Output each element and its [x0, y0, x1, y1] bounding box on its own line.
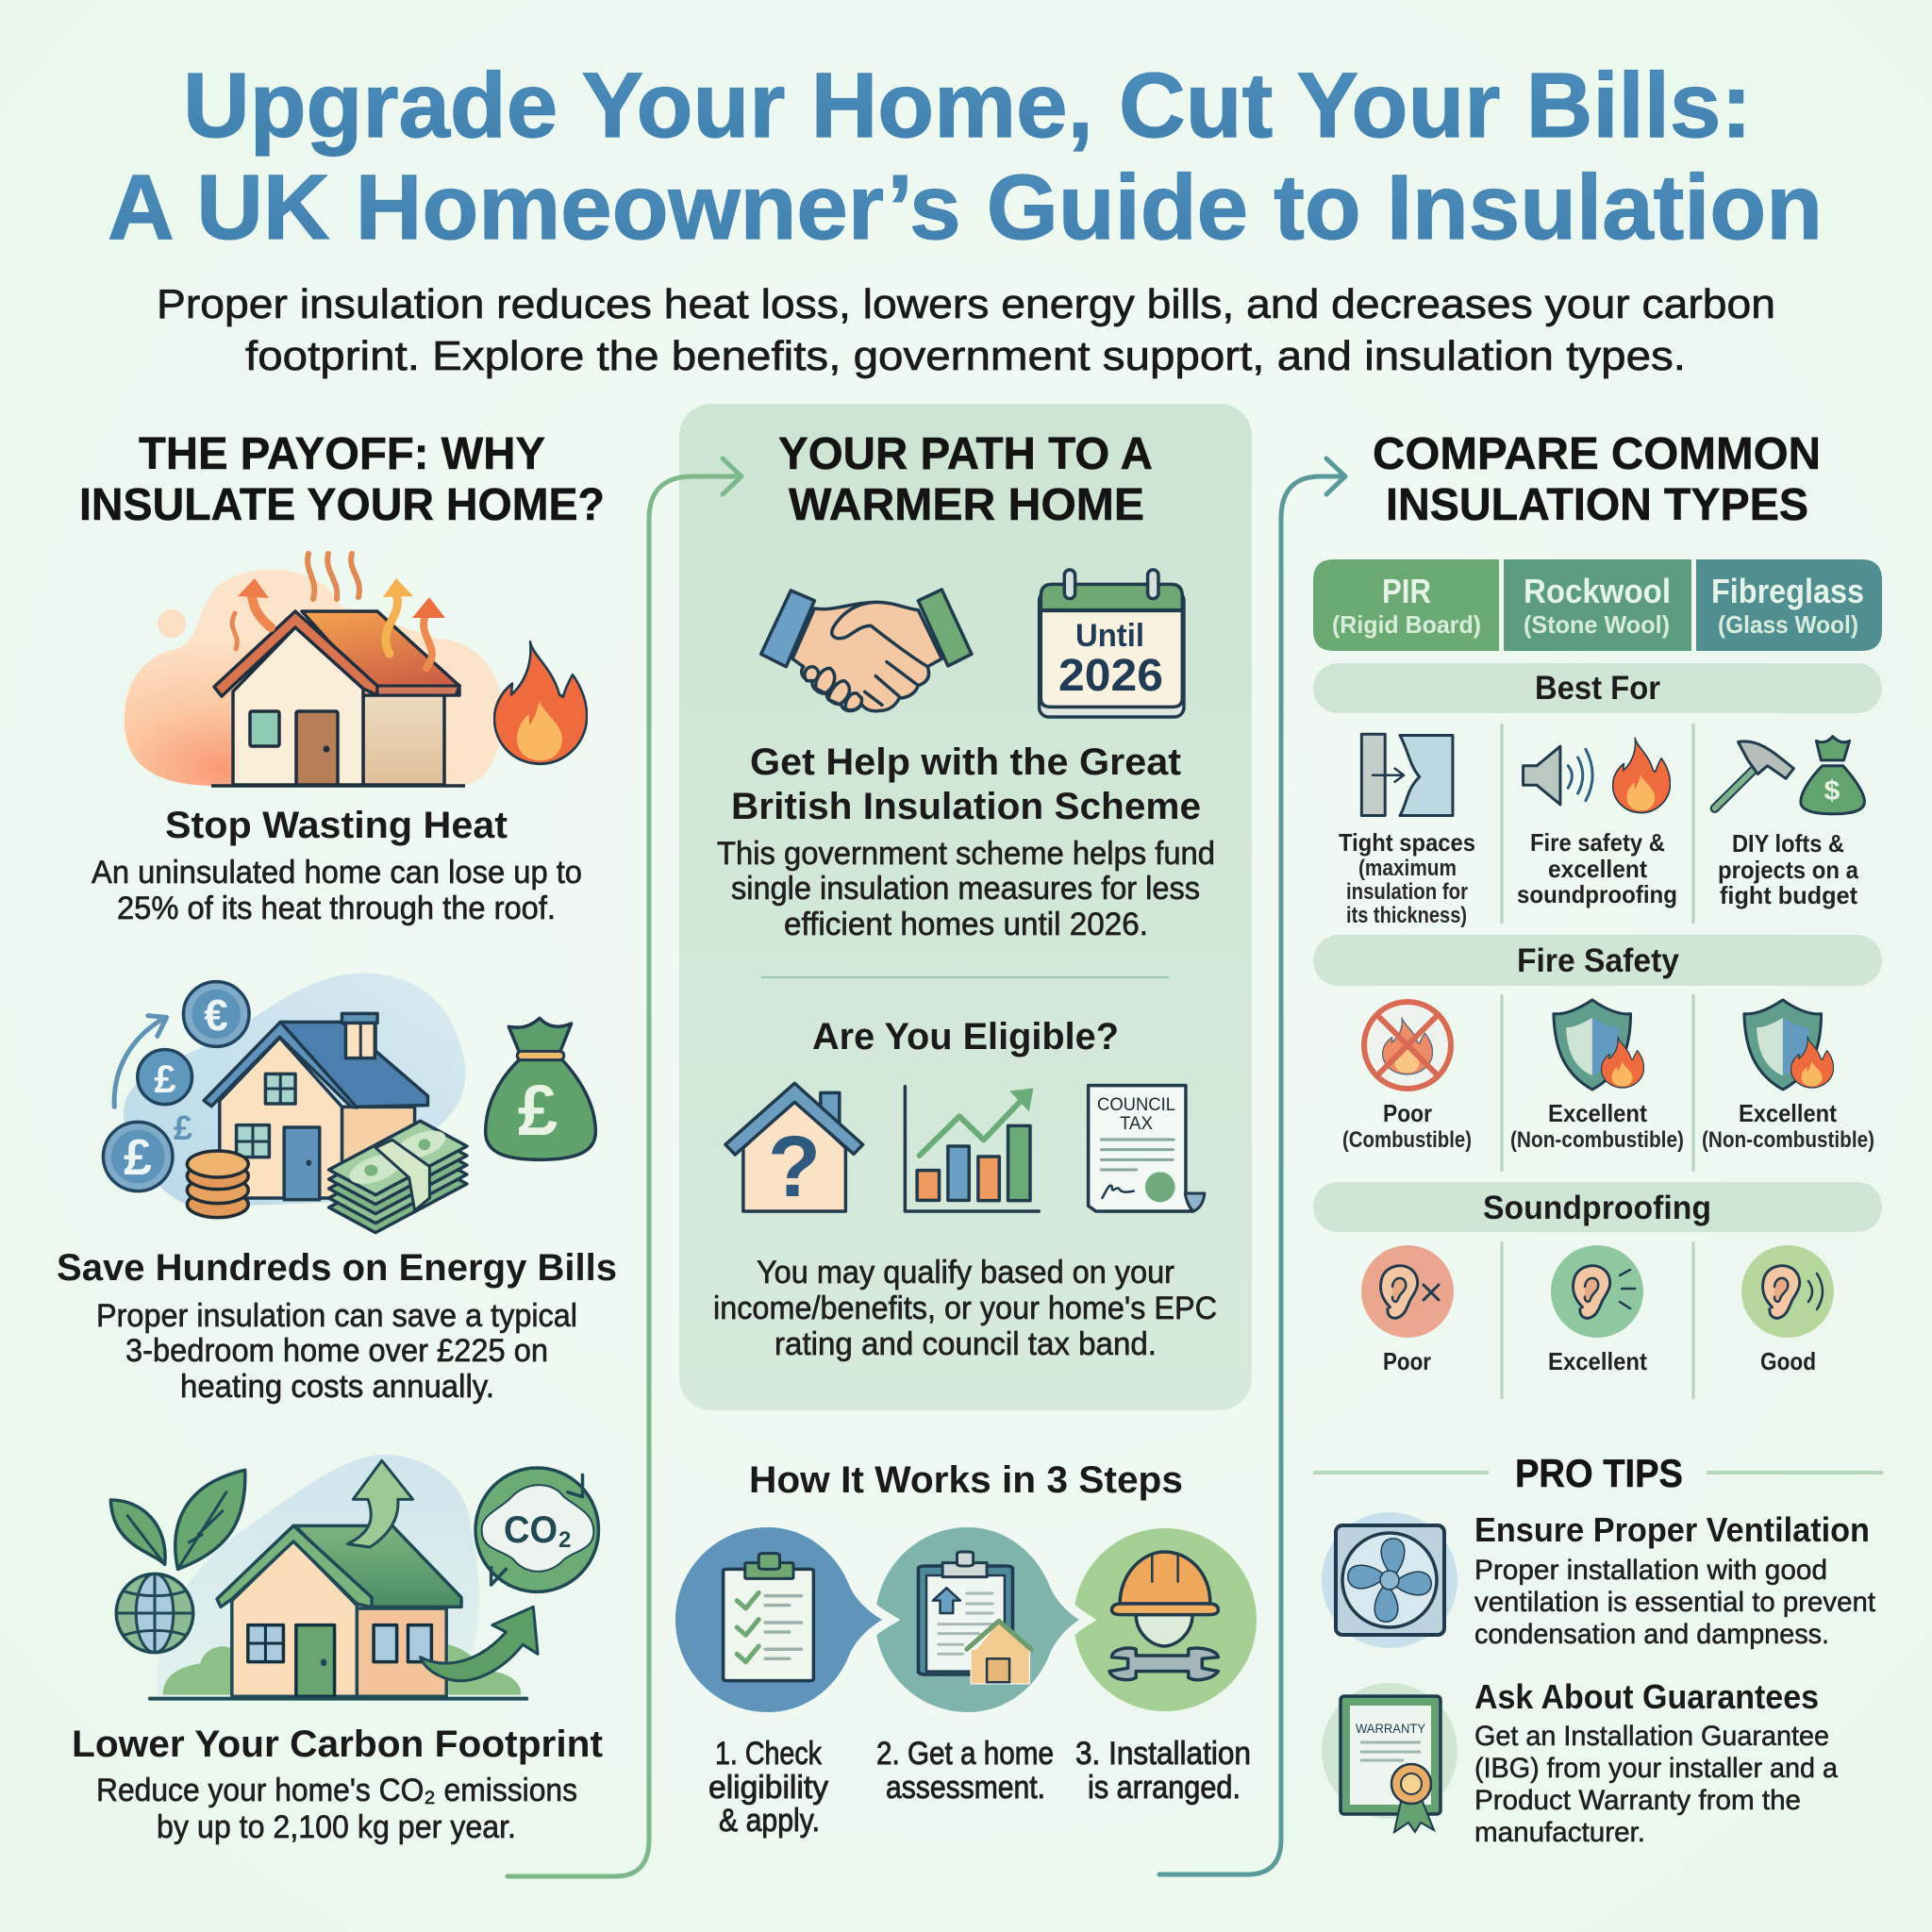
text: carbon: Reduce your home's CO₂ emissions: [96, 1773, 577, 1808]
text: step 1: 1. Check: [715, 1736, 823, 1772]
text: tight spaces: Tight spaces: [1339, 828, 1475, 857]
icon: bar chart with rising arrow: [905, 1087, 1039, 1211]
table header: fibreglass: [1696, 559, 1882, 651]
arrow: green connector: [508, 458, 741, 1876]
text: poor combustible: [1342, 1099, 1472, 1153]
icon: house with question mark: ?: [768, 1119, 821, 1215]
text: tight spaces: its thickness): [1346, 903, 1467, 928]
step circles: [675, 1527, 1257, 1712]
heading: are you eligible: Are You Eligible?: [812, 1016, 1119, 1058]
text: step 2: assessment.: [886, 1770, 1045, 1806]
heading: the payoff: THE PAYOFF: WHY: [139, 429, 545, 479]
icon: council tax document: COUNCIL: [1097, 1095, 1175, 1115]
text: savings: Proper insulation can save a typical: [96, 1298, 577, 1334]
panel: the payoff: [57, 429, 617, 1845]
icon: calendar until 2026: Until: [1075, 618, 1144, 654]
row header: fire safety: Fire Safety: [1517, 942, 1680, 979]
icon: home assessment clipboard: [918, 1552, 1031, 1684]
text: guarantees tip: (IBG) from your installer and a: [1474, 1753, 1838, 1784]
icon: green house with carbon reduction: CO: [504, 1509, 558, 1551]
heading: warmer home: [778, 429, 1153, 530]
panel: pro tips: [1313, 1451, 1883, 1848]
text: ventilation tip: Ensure Proper Ventilation: [1474, 1510, 1870, 1549]
panel: path to a warmer home: [679, 404, 1252, 1410]
text: savings: 3-bedroom home over £225 on: [125, 1333, 548, 1369]
text: step 1: & apply.: [719, 1803, 820, 1839]
icon: house with savings: £: [174, 1108, 192, 1147]
icon: PIR wall section: [1361, 734, 1453, 816]
icon: combustible prohibited: [1364, 1002, 1451, 1089]
text: step 3: is arranged.: [1088, 1770, 1241, 1806]
row header: soundproofing: [1313, 1182, 1882, 1232]
icon: house with savings: £: [518, 1071, 558, 1151]
table header: rockwool: Rockwool: [1524, 572, 1671, 610]
text: fibreglass fire: (Non-combustible): [1702, 1127, 1874, 1153]
heading: great british insulation scheme: [731, 741, 1201, 827]
heading: warmer home: YOUR PATH TO A: [778, 429, 1153, 479]
icon: warranty certificate: [1322, 1683, 1457, 1832]
icon: house with question mark: [725, 1083, 863, 1215]
heading: pro tips: PRO TIPS: [1515, 1451, 1683, 1495]
heading: lower carbon: Lower Your Carbon Footprint: [72, 1724, 603, 1765]
text: fibreglass fire: Excellent: [1739, 1099, 1837, 1127]
icon: calendar until 2026: [1040, 570, 1184, 717]
text: diy lofts: DIY lofts &: [1732, 829, 1844, 858]
text: guarantees tip: [1474, 1677, 1838, 1848]
subtitle: footprint. Explore the benefits, government support, and insulation types.: [245, 333, 1686, 379]
title: Upgrade Your Home, Cut Your Bills:: [183, 54, 1752, 157]
icon: ear poor: [1361, 1245, 1454, 1338]
text: scheme description: efficient homes until 2026.: [784, 907, 1148, 942]
heading: the payoff: [79, 429, 605, 530]
heading: stop wasting heat: Stop Wasting Heat: [165, 805, 508, 846]
text: diy lofts: [1718, 829, 1858, 909]
text: scheme description: [717, 836, 1215, 942]
icon: fibreglass shield: [1744, 1000, 1834, 1090]
text: tight spaces: insulation for: [1346, 879, 1468, 905]
text: tight spaces: (maximum: [1358, 856, 1457, 881]
icon: hammer and money bag: $: [1824, 775, 1840, 807]
row header: soundproofing: Soundproofing: [1483, 1190, 1711, 1226]
icon: calendar until 2026: 2026: [1058, 651, 1163, 701]
heading: compare: INSULATION TYPES: [1386, 480, 1808, 530]
heading: great british insulation scheme: Get Help with the Great: [750, 741, 1181, 783]
text: carbon: by up to 2,100 kg per year.: [157, 1809, 516, 1845]
row header: best for: [1313, 663, 1882, 713]
table header: PIR: [1313, 559, 1499, 651]
text: heat loss: [92, 855, 582, 926]
icon: council tax document: TAX: [1120, 1114, 1153, 1134]
row header: fire safety: [1313, 935, 1882, 986]
text: step 2: 2. Get a home: [876, 1736, 1054, 1772]
text: poor combustible: (Combustible): [1342, 1127, 1472, 1153]
heading: warmer home: WARMER HOME: [789, 480, 1144, 530]
text: guarantees tip: manufacturer.: [1474, 1817, 1645, 1848]
icon: rockwool shield: [1554, 1000, 1644, 1090]
text: carbon: [96, 1773, 577, 1845]
title: [108, 54, 1823, 258]
text: step 3: 3. Installation: [1075, 1736, 1251, 1772]
text: savings: [96, 1298, 577, 1405]
text: good sound: Good: [1760, 1347, 1816, 1375]
text: fire safety and soundproofing: excellent: [1548, 855, 1647, 883]
icon: ear good: [1741, 1245, 1834, 1338]
text: scheme description: single insulation measures for less: [731, 871, 1200, 907]
subtitle: [157, 281, 1775, 379]
heading: the payoff: INSULATE YOUR HOME?: [79, 480, 605, 530]
subtitle: Proper insulation reduces heat loss, lowers energy bills, and decreases your carbon: [157, 281, 1775, 327]
icon: house with savings: €: [204, 991, 228, 1040]
icon: checklist clipboard: [724, 1554, 813, 1681]
table header: PIR: (Rigid Board): [1332, 610, 1481, 639]
icon: house losing heat: [125, 554, 587, 786]
text: step 1: eligibility: [708, 1770, 828, 1806]
text: rockwool fire: (Non-combustible): [1510, 1127, 1684, 1153]
text: heat loss: An uninsulated home can lose up to: [92, 855, 582, 891]
icon: warranty certificate: WARRANTY: [1356, 1721, 1426, 1736]
heading: compare: [1373, 429, 1821, 530]
text: ventilation tip: [1474, 1510, 1876, 1650]
icon: hammer and money bag: [1715, 737, 1864, 814]
row header: best for: Best For: [1535, 670, 1660, 707]
text: heat loss: 25% of its heat through the roof.: [117, 891, 556, 926]
panel: how it works: [675, 1459, 1257, 1839]
icon: house with savings: [103, 974, 595, 1233]
text: eligibility: You may qualify based on your: [757, 1255, 1174, 1291]
text: rockwool fire: Excellent: [1548, 1099, 1647, 1127]
icon: handshake: [761, 590, 972, 711]
text: eligibility: rating and council tax band.: [774, 1326, 1157, 1362]
text: rockwool fire: [1510, 1099, 1684, 1153]
heading: save hundreds: Save Hundreds on Energy Bills: [57, 1247, 617, 1289]
text: eligibility: income/benefits, or your home's EPC: [713, 1291, 1217, 1326]
text: ventilation tip: condensation and dampness.: [1474, 1619, 1829, 1650]
text: guarantees tip: Product Warranty from the: [1474, 1785, 1801, 1816]
text: ventilation tip: Proper installation with good: [1474, 1555, 1827, 1586]
icon: ventilation fan: [1322, 1512, 1457, 1648]
icon: council tax document: [1089, 1086, 1205, 1211]
icon: ear excellent: [1551, 1245, 1643, 1338]
table header: fibreglass: (Glass Wool): [1718, 610, 1858, 639]
text: guarantees tip: Get an Installation Guarantee: [1474, 1721, 1829, 1752]
icon: hard hat and wrench: [1109, 1552, 1218, 1680]
heading: compare: COMPARE COMMON: [1373, 429, 1821, 479]
text: ventilation tip: ventilation is essential to prevent: [1474, 1587, 1876, 1618]
icon: speaker and flame: [1524, 738, 1670, 813]
icon: house with savings: £: [154, 1057, 176, 1101]
text: fire safety and soundproofing: soundproofing: [1517, 880, 1677, 908]
text: excellent sound: Excellent: [1548, 1347, 1647, 1375]
text: scheme description: This government scheme helps fund: [717, 836, 1215, 872]
title: A UK Homeowner’s Guide to Insulation: [108, 156, 1823, 258]
text: diy lofts: fight budget: [1720, 881, 1857, 909]
icon: green house with carbon reduction: 2: [558, 1527, 571, 1553]
text: diy lofts: projects on a: [1718, 856, 1858, 884]
text: tight spaces: [1339, 828, 1475, 928]
table header: rockwool: (Stone Wool): [1524, 610, 1670, 639]
text: step 3: [1075, 1736, 1251, 1806]
icon: house with savings: £: [124, 1129, 152, 1186]
text: savings: heating costs annually.: [180, 1369, 494, 1405]
heading: great british insulation scheme: British Insulation Scheme: [731, 786, 1201, 827]
text: fire safety and soundproofing: [1517, 828, 1677, 908]
text: fibreglass fire: [1702, 1099, 1874, 1153]
arrow: teal connector: [1159, 458, 1345, 1874]
heading: three steps: How It Works in 3 Steps: [749, 1459, 1183, 1501]
text: eligibility: [713, 1255, 1217, 1362]
table header: PIR: PIR: [1382, 572, 1431, 610]
panel: compare insulation types: [1313, 429, 1882, 1399]
icon: green house with carbon reduction: [110, 1455, 599, 1699]
text: step 2: [876, 1736, 1054, 1806]
text: guarantees tip: Ask About Guarantees: [1474, 1677, 1819, 1716]
text: step 1: [708, 1736, 828, 1839]
text: fire safety and soundproofing: Fire safety &: [1530, 828, 1665, 857]
table header: rockwool: [1504, 559, 1691, 651]
text: poor combustible: Poor: [1383, 1099, 1432, 1127]
text: poor sound: Poor: [1383, 1347, 1431, 1375]
table header: fibreglass: Fibreglass: [1711, 572, 1864, 610]
